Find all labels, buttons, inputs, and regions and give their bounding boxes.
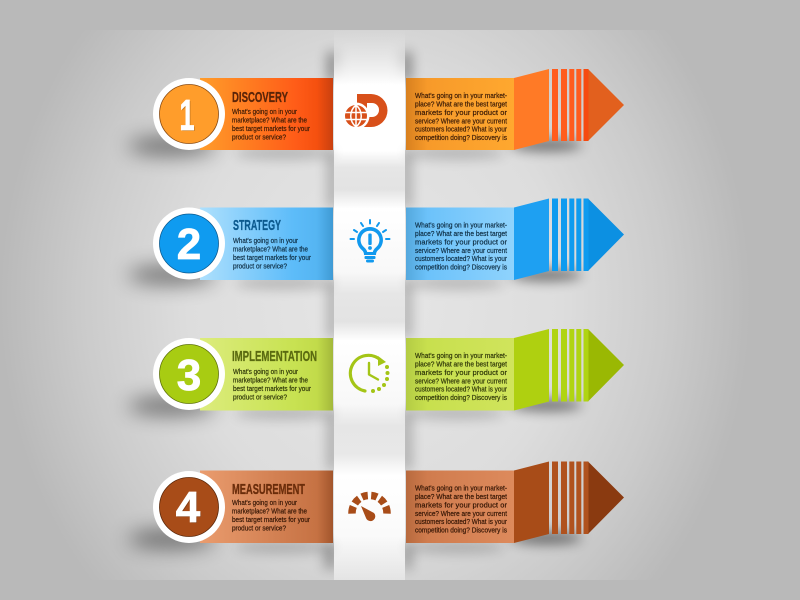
arrow row 3	[514, 329, 624, 410]
left body text row 4: product or service?	[232, 524, 286, 532]
right body text row 1: place? What are the best target	[415, 100, 508, 108]
number badge 2	[153, 208, 225, 280]
left body text row 4: best target markets for your	[232, 515, 310, 524]
row 1: discovery	[128, 69, 624, 159]
right body text row 3: service? Where are your current	[415, 376, 508, 386]
right band row 2	[406, 208, 514, 280]
right body text row 4: What's going on in your market-	[415, 484, 507, 492]
icon: light bulb	[350, 220, 390, 262]
right body text row 4: service? Where are your current	[415, 509, 508, 518]
left body text row 2: What's going on in your	[233, 236, 298, 245]
left body text row 1	[232, 107, 310, 142]
shadows row 3	[128, 397, 582, 419]
number badge 3	[153, 338, 225, 410]
left body text row 2: best target markets for your	[233, 253, 311, 262]
right body text row 4: customers located? What is your	[415, 517, 507, 526]
icon: clock	[350, 355, 390, 393]
row 4: measurement	[128, 462, 624, 553]
infographic canvas	[38, 30, 713, 580]
right body text row 2: customers located? What is your	[415, 254, 507, 263]
center white strip	[334, 30, 405, 580]
right body text row 3: place? What are the best target	[415, 360, 508, 368]
right body text row 1	[415, 91, 508, 142]
right body text row 1: service? Where are your current	[415, 116, 508, 126]
shadows row 4	[128, 530, 582, 553]
left body text row 2: product or service?	[233, 262, 287, 270]
right body text row 1: customers located? What is your	[415, 124, 507, 134]
right band row 4	[406, 470, 514, 543]
left band row 1	[200, 78, 333, 150]
left body text row 3	[233, 367, 311, 402]
right body text row 4: competition doing? Discovery is	[415, 526, 507, 534]
shadows row 1	[128, 137, 582, 159]
shadows row 2	[128, 266, 582, 289]
right body text row 4: place? What are the best target	[415, 492, 508, 501]
arrow row 4	[514, 462, 624, 543]
left body text row 3: What's going on in your	[233, 367, 298, 376]
left body text row 4	[232, 498, 310, 532]
row 2: strategy	[128, 198, 624, 289]
center strip shadows	[324, 52, 412, 569]
left band row 4	[200, 470, 333, 543]
right body text row 2: service? Where are your current	[415, 246, 508, 255]
right body text row 4: markets for your product or	[415, 500, 508, 510]
left body text row 4: What's going on in your	[232, 498, 297, 507]
left band row 2	[200, 208, 333, 280]
left body text row 1: product or service?	[232, 132, 286, 142]
arrow row 1	[514, 69, 624, 150]
row 3: implementation	[128, 329, 624, 419]
right body text row 3: What's going on in your market-	[415, 351, 507, 360]
right body text row 1: competition doing? Discovery is	[415, 133, 507, 142]
right body text row 1: What's going on in your market-	[415, 91, 507, 100]
left body text row 4: marketplace? What are the	[232, 506, 307, 516]
left band row 3	[200, 338, 333, 410]
right body text row 2: markets for your product or	[415, 238, 508, 246]
right body text row 3: markets for your product or	[415, 368, 508, 377]
right body text row 1: markets for your product or	[415, 108, 508, 117]
heading: implementation: IMPLEMENTATION	[232, 349, 317, 365]
number badge 4	[153, 471, 225, 543]
left body text row 3: best target markets for your	[233, 384, 311, 393]
icon: gauge	[352, 496, 387, 521]
number badge 1: 1	[180, 92, 196, 141]
number badge 4: 4	[177, 484, 202, 533]
heading: measurement: MEASUREMENT	[232, 482, 305, 498]
icon: globe D	[342, 94, 388, 130]
left body text row 2	[233, 236, 311, 270]
left body text row 1: What's going on in your	[232, 107, 297, 116]
left body text row 1: marketplace? What are the	[232, 116, 307, 124]
left body text row 3: marketplace? What are the	[233, 376, 308, 384]
right body text row 3	[415, 351, 508, 402]
arrow row 2	[514, 198, 624, 280]
number badge 1	[153, 78, 225, 150]
right body text row 4	[415, 484, 508, 534]
right body text row 2: competition doing? Discovery is	[415, 262, 507, 272]
left body text row 3: product or service?	[233, 392, 287, 402]
right band row 1	[406, 78, 514, 150]
heading: discovery: DISCOVERY	[232, 90, 288, 106]
right body text row 3: customers located? What is your	[415, 384, 507, 394]
number badge 3: 3	[177, 351, 201, 400]
left body text row 2: marketplace? What are the	[233, 244, 308, 254]
number badge 4: 4	[176, 483, 201, 532]
heading: strategy: STRATEGY	[233, 218, 281, 234]
number badge 1: 1	[180, 91, 194, 140]
right band row 3	[406, 338, 514, 410]
right body text row 2	[415, 220, 508, 272]
right body text row 2: What's going on in your market-	[415, 220, 507, 230]
left body text row 1: best target markets for your	[232, 124, 310, 133]
right body text row 3: competition doing? Discovery is	[415, 393, 507, 402]
number badge 2: 2	[177, 220, 201, 269]
right body text row 2: place? What are the best target	[415, 229, 508, 238]
